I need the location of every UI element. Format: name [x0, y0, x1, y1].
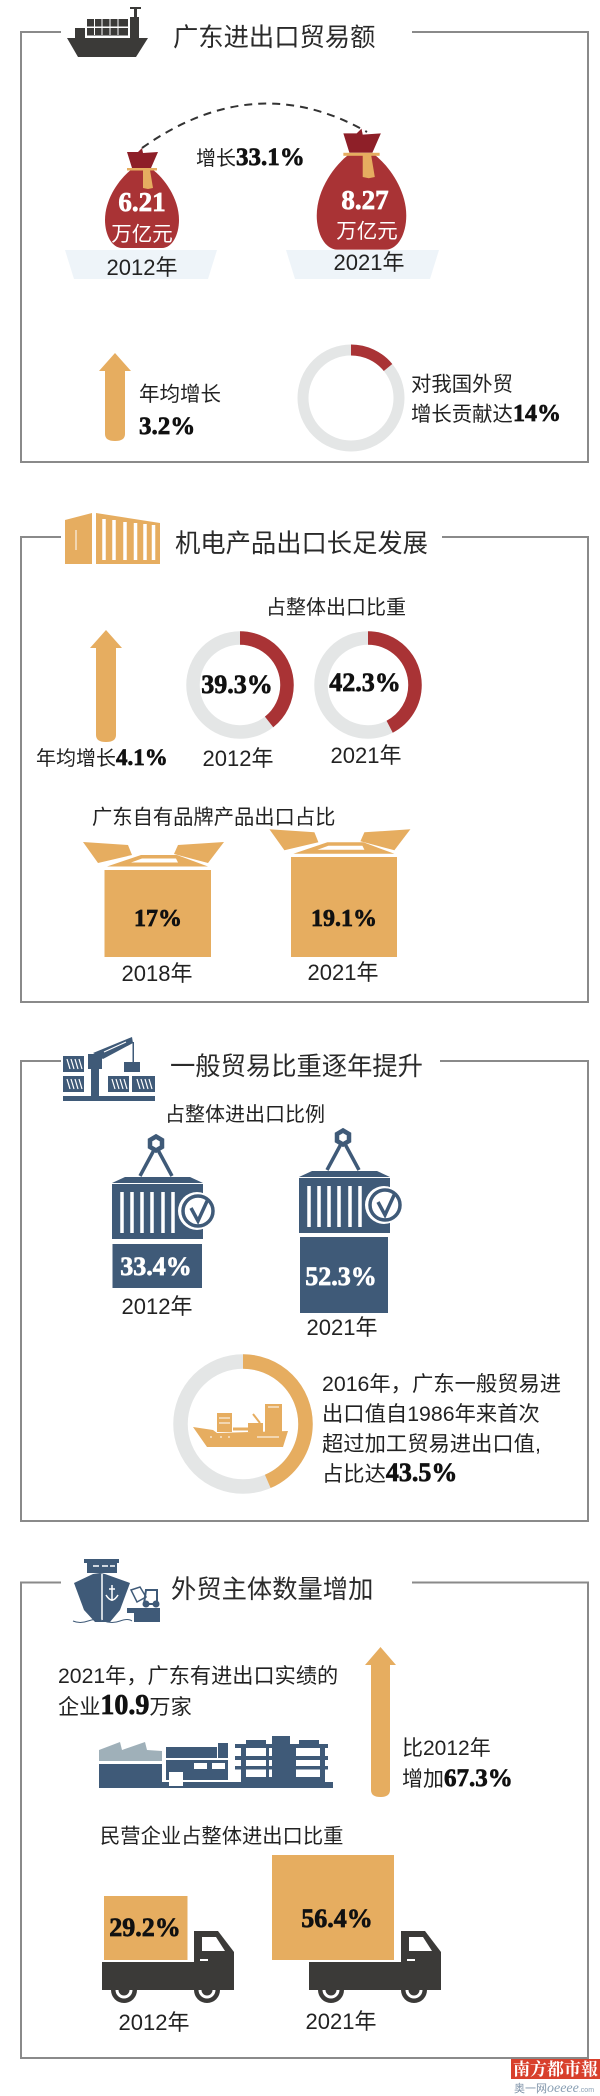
sub heading: share of exports: 占整体出口比重 [266, 596, 406, 619]
panel: foreign trade value [21, 7, 588, 462]
growth text: 增加 [402, 1768, 444, 1791]
icon: open box 2021 [269, 829, 410, 957]
contribution text: 增长贡献达 [411, 403, 513, 426]
enterprise count text: 企业 [58, 1695, 100, 1719]
year label 2021: 2021年 [307, 1315, 377, 1340]
note text: 占比达 [322, 1462, 386, 1486]
icon: hanging container 2012 [112, 1136, 216, 1239]
icon: money bag 2012 [105, 148, 179, 248]
panel frame [21, 1582, 588, 2058]
panel frame [21, 1061, 588, 1521]
icon: truck 2021 [309, 1931, 441, 2003]
value 2021: 8.27 [341, 185, 389, 215]
year label 2012: 2012年 [203, 746, 273, 771]
donut: contribution 14% [303, 350, 399, 446]
donut: 2012 share [193, 638, 287, 732]
year label 2021: 2021年 [306, 2009, 376, 2034]
value 17%: 17% [134, 906, 182, 932]
donut: 2021 share [321, 638, 415, 732]
heading: 一般贸易比重逐年提升 [170, 1053, 423, 1081]
value 19.1%: 19.1% [311, 906, 377, 932]
icon: cargo ship [193, 1404, 288, 1447]
icon: truck 2012 [102, 1931, 234, 2003]
watermark logo [511, 2059, 600, 2096]
enterprise count text: 10.9万家 [100, 1690, 192, 1721]
bar 2021 [300, 1237, 388, 1313]
value 42.3%: 42.3% [329, 668, 401, 697]
value 29.2%: 29.2% [109, 1913, 181, 1942]
cargo box 2012 [104, 1896, 188, 1960]
icon: hanging container 2021 [299, 1130, 403, 1233]
icon: money bag 2021 [317, 129, 406, 250]
label: growth: 增长33.1% [196, 144, 305, 171]
panel: general trade [21, 1037, 588, 1521]
icon: ship front and forklift [73, 1559, 160, 1622]
annual growth text: 年均增长 [139, 383, 221, 406]
panel: electromechanical products [21, 513, 588, 1002]
icon: open box 2018 [83, 842, 224, 957]
platform 2021 [286, 250, 439, 279]
cargo box 2021 [272, 1855, 394, 1960]
year label 2012: 2012年 [119, 2010, 189, 2035]
value 56.4%: 56.4% [301, 1904, 373, 1933]
dashed growth arc [142, 104, 367, 148]
note text: 超过加工贸易进出口值, [322, 1432, 541, 1456]
icon: factory buildings [99, 1736, 333, 1788]
year label 2012: 2012年 [122, 1294, 192, 1319]
year label 2021: 2021年 [334, 250, 404, 275]
contribution text: 14% [513, 401, 561, 427]
panel frame [21, 537, 588, 1002]
heading: 机电产品出口长足发展 [175, 530, 428, 558]
year label 2018: 2018年 [122, 961, 192, 986]
growth text: 比2012年 [402, 1737, 491, 1760]
sub heading: private enterprises: 民营企业占整体进出口比重 [100, 1825, 343, 1848]
year label 2012: 2012年 [107, 255, 177, 280]
arrow: annual growth [99, 353, 131, 441]
icon: container ship [67, 7, 148, 57]
note text: 出口值自1986年来首次 [322, 1402, 540, 1426]
panel frame [21, 32, 588, 462]
arrow: growth [365, 1647, 396, 1797]
year label 2021: 2021年 [331, 743, 401, 768]
sub heading: own brand: 广东自有品牌产品出口占比 [92, 806, 335, 829]
unit 2012: 万亿元 [111, 223, 173, 246]
note text: 2016年，广东一般贸易进 [322, 1372, 561, 1396]
heading: 外贸主体数量增加 [171, 1576, 373, 1604]
sub heading: proportion: 占整体进出口比例 [165, 1103, 325, 1126]
icon: shipping container [65, 513, 160, 564]
heading: 广东进出口贸易额 [173, 24, 375, 52]
annual growth text: 3.2% [139, 413, 195, 440]
value 39.3%: 39.3% [201, 670, 273, 699]
enterprise count text: 2021年，广东有进出口实绩的 [58, 1665, 338, 1688]
annual growth text: 年均增长4.1% [36, 745, 168, 770]
arrow: annual growth [90, 630, 122, 742]
watermark logo: 南方都市報 [513, 2059, 598, 2079]
unit 2021: 万亿元 [336, 220, 398, 243]
icon: port crane [63, 1037, 155, 1101]
platform 2012 [65, 250, 217, 279]
panel: trade entities [21, 1559, 588, 2058]
value 52.3%: 52.3% [305, 1262, 377, 1291]
value 33.4%: 33.4% [120, 1252, 192, 1281]
watermark logo: 奥一网oeeee.com [514, 2081, 594, 2096]
year label 2021: 2021年 [308, 960, 378, 985]
growth text: 67.3% [444, 1765, 513, 1792]
note text: 43.5% [386, 1458, 457, 1487]
bar 2012 [112, 1244, 202, 1288]
contribution text: 对我国外贸 [411, 374, 513, 396]
value 2012: 6.21 [118, 187, 166, 217]
donut: 43.5% [180, 1362, 306, 1486]
